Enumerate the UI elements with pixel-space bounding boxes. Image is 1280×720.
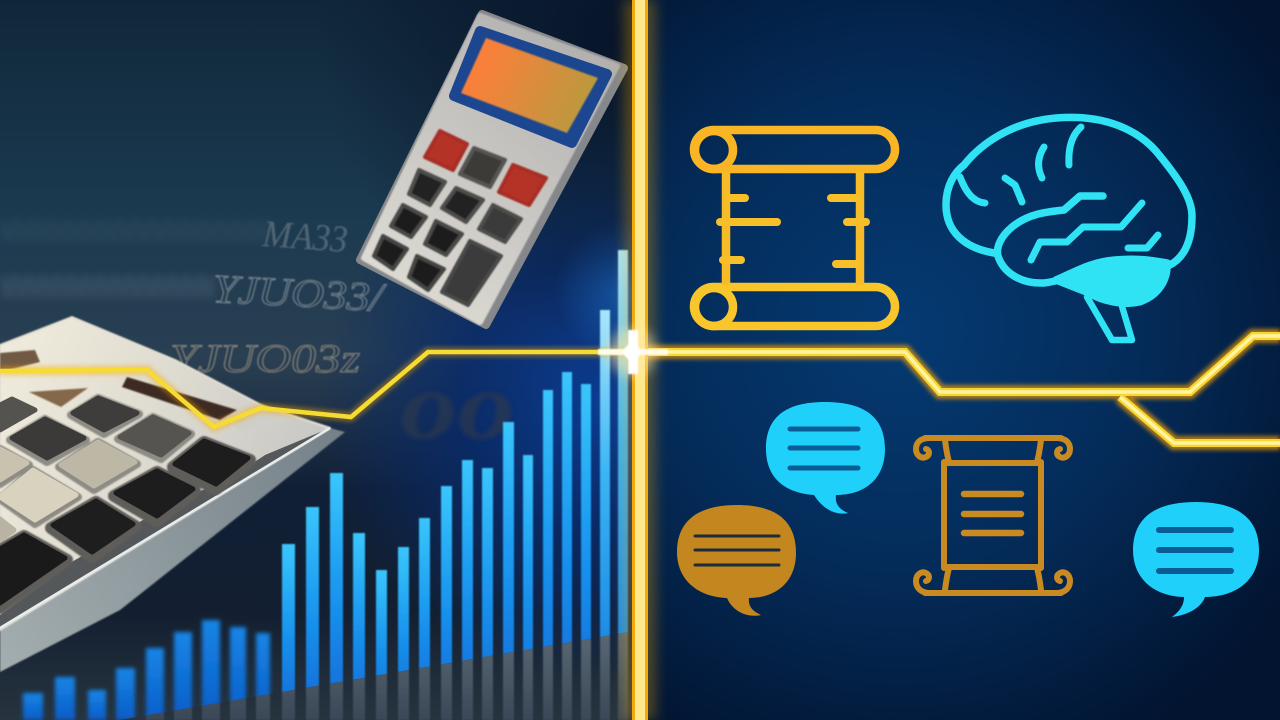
- scroll text lines: [964, 494, 1021, 533]
- icon: upper calculator: [360, 14, 624, 325]
- bar chart: reflected grey base: [146, 632, 628, 720]
- icon: brain: [946, 117, 1192, 340]
- ghosted handwritten figures: MA33: [260, 213, 349, 261]
- bar chart: [23, 250, 628, 720]
- icon: gold speech bubble: [677, 505, 796, 616]
- calculator top surface: [0, 317, 330, 630]
- flare at line crossing: [598, 328, 668, 376]
- calculator display and badge: [0, 350, 268, 435]
- calculator display: [454, 31, 607, 143]
- bar chart: blue soft bars: [23, 620, 270, 720]
- calculator key shadows: [0, 442, 250, 608]
- ghosted handwritten figures: MMMMMMMMMMMMMMM: [0, 269, 215, 306]
- icon: small gold scroll: [916, 438, 1070, 593]
- ghosted handwritten figures: YJUO33/: [212, 266, 388, 320]
- panel: right background: [640, 0, 1280, 720]
- ghosted handwritten figures: [0, 213, 515, 459]
- brain cerebellum: [1056, 259, 1167, 303]
- ghosted handwritten figures: YJUO03z: [170, 336, 361, 381]
- icon: cyan speech bubble right: [1133, 502, 1259, 617]
- icon: large gold scroll: [694, 130, 895, 326]
- brain outer outline: [946, 117, 1192, 266]
- calculator beige keys: [0, 442, 135, 540]
- panel: left background: [0, 0, 640, 720]
- circuit line: left segment: [0, 352, 640, 427]
- icon: cyan speech bubble top: [766, 402, 885, 514]
- brain inner lobe: [998, 196, 1103, 283]
- brain folds: [960, 127, 1158, 260]
- calculator side edge: [0, 428, 345, 672]
- scroll curls: [916, 438, 1070, 593]
- icon: lower calculator: [0, 317, 345, 672]
- brain stem: [1087, 297, 1132, 340]
- calculator body: [360, 14, 624, 325]
- vertical divider line: [624, 0, 656, 720]
- calculator dark keys: [0, 398, 248, 603]
- calculator keys: [374, 131, 546, 305]
- bar chart: sharp bars: [282, 250, 628, 720]
- circuit line: right segment with branch: [640, 336, 1280, 443]
- ghosted handwritten figures: MMMMMMMMMMMMMMMM: [0, 213, 270, 250]
- ghosted handwritten figures: oo: [400, 352, 515, 459]
